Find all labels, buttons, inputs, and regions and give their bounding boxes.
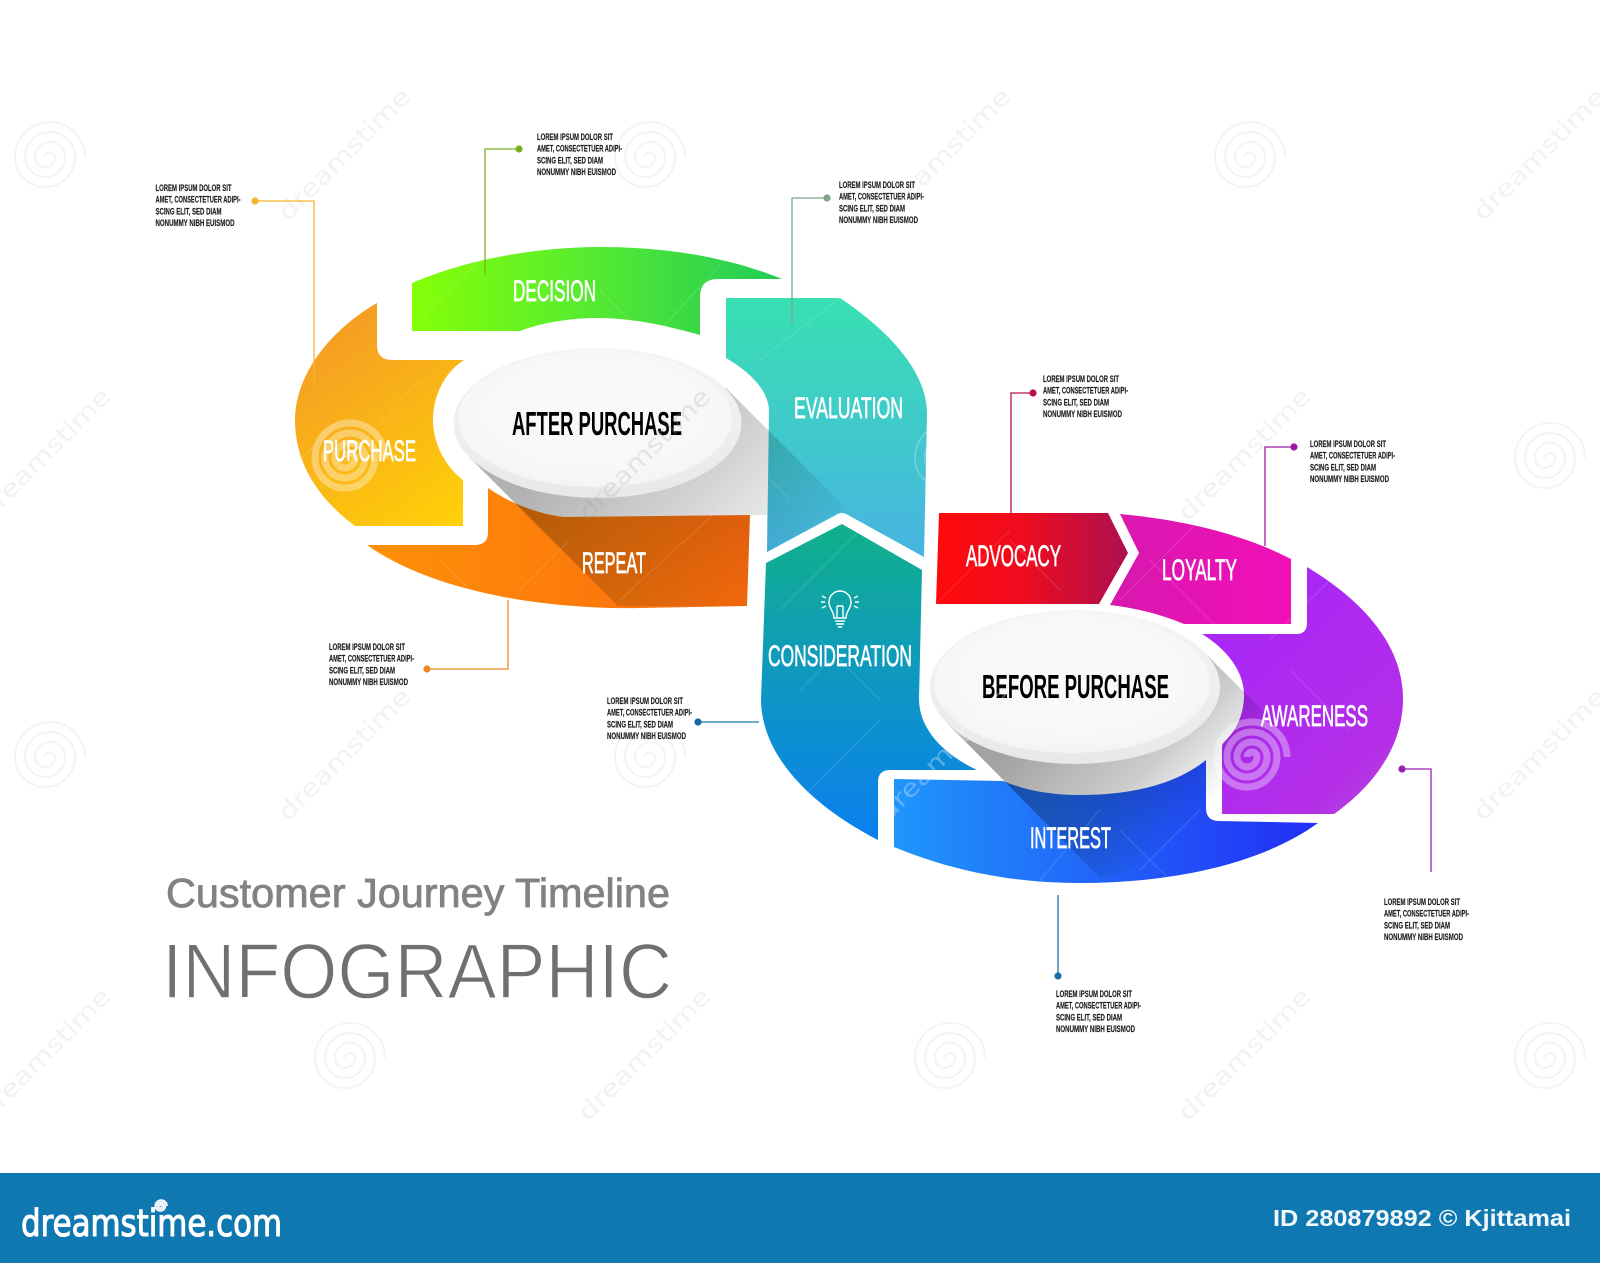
connector: advocacy bbox=[1011, 389, 1037, 513]
text: dreamstime bbox=[873, 83, 1016, 226]
text block: decision: AMET, CONSECTETUER ADIPI- bbox=[537, 144, 622, 154]
title: Customer Journey Timeline bbox=[166, 870, 670, 916]
text block: interest: SCING ELIT, SED DIAM bbox=[1056, 1012, 1122, 1022]
label: awareness: AWARENESS bbox=[1261, 700, 1368, 733]
text block: awareness: SCING ELIT, SED DIAM bbox=[1384, 920, 1450, 930]
footer bar bbox=[0, 1173, 1600, 1263]
text block: decision bbox=[537, 132, 622, 177]
text block: consideration bbox=[607, 696, 692, 741]
text block: loyalty bbox=[1310, 439, 1395, 484]
footer logo: dreamstime.com bbox=[21, 1202, 282, 1245]
text block: advocacy: AMET, CONSECTETUER ADIPI- bbox=[1043, 386, 1128, 396]
connector: loyalty bbox=[1265, 443, 1298, 546]
text block: decision: NONUMMY NIBH EUISMOD bbox=[537, 167, 616, 177]
text block: loyalty: NONUMMY NIBH EUISMOD bbox=[1310, 474, 1389, 484]
segment: advocacy bbox=[936, 513, 1128, 604]
text block: consideration: SCING ELIT, SED DIAM bbox=[607, 719, 673, 729]
footer credit: ID 280879892 © Kjittamai bbox=[1273, 1205, 1571, 1231]
shadow: after purchase bbox=[470, 388, 846, 606]
label: decision: DECISION bbox=[513, 275, 596, 308]
text block: interest: NONUMMY NIBH EUISMOD bbox=[1056, 1024, 1135, 1034]
segment: awareness bbox=[1202, 567, 1403, 814]
label: advocacy: ADVOCACY bbox=[966, 540, 1061, 573]
text block: loyalty: AMET, CONSECTETUER ADIPI- bbox=[1310, 451, 1395, 461]
text: dreamstime bbox=[873, 683, 1016, 826]
text block: loyalty: SCING ELIT, SED DIAM bbox=[1310, 462, 1376, 472]
text: dreamstime bbox=[273, 683, 416, 826]
text block: consideration: NONUMMY NIBH EUISMOD bbox=[607, 731, 686, 741]
connector: evaluation bbox=[792, 194, 831, 325]
center pill: before purchase: BEFORE PURCHASE bbox=[982, 668, 1169, 705]
text block: consideration: LOREM IPSUM DOLOR SIT bbox=[607, 696, 683, 706]
text block: advocacy: SCING ELIT, SED DIAM bbox=[1043, 397, 1109, 407]
text block: advocacy: NONUMMY NIBH EUISMOD bbox=[1043, 409, 1122, 419]
text block: purchase: SCING ELIT, SED DIAM bbox=[156, 206, 222, 216]
segment: repeat bbox=[367, 488, 750, 608]
connector: awareness bbox=[1398, 765, 1431, 872]
text block: awareness: LOREM IPSUM DOLOR SIT bbox=[1384, 897, 1460, 907]
text block: awareness: NONUMMY NIBH EUISMOD bbox=[1384, 932, 1463, 942]
segment: interest bbox=[894, 760, 1318, 883]
connector: interest bbox=[1054, 895, 1062, 980]
connector: repeat bbox=[423, 600, 508, 673]
text block: interest bbox=[1056, 989, 1141, 1034]
text block: decision: SCING ELIT, SED DIAM bbox=[537, 155, 603, 165]
text: dreamstime bbox=[573, 983, 716, 1126]
text block: repeat: NONUMMY NIBH EUISMOD bbox=[329, 677, 408, 687]
text block: evaluation: AMET, CONSECTETUER ADIPI- bbox=[839, 192, 924, 202]
text block: purchase: NONUMMY NIBH EUISMOD bbox=[156, 218, 235, 228]
text block: interest: AMET, CONSECTETUER ADIPI- bbox=[1056, 1001, 1141, 1011]
connector: decision bbox=[485, 145, 523, 275]
text: dreamstime bbox=[1468, 683, 1600, 826]
text: dreamstime bbox=[573, 383, 716, 526]
label: loyalty: LOYALTY bbox=[1162, 554, 1237, 587]
text block: decision: LOREM IPSUM DOLOR SIT bbox=[537, 132, 613, 142]
segment: consideration bbox=[761, 524, 977, 840]
text block: evaluation: SCING ELIT, SED DIAM bbox=[839, 203, 905, 213]
segment: loyalty bbox=[1110, 514, 1291, 624]
text block: repeat: LOREM IPSUM DOLOR SIT bbox=[329, 642, 405, 652]
text block: advocacy bbox=[1043, 374, 1128, 419]
connector lines and dots bbox=[251, 145, 1431, 980]
connector: consideration bbox=[694, 718, 759, 726]
text block: awareness bbox=[1384, 897, 1469, 942]
title bbox=[162, 870, 672, 1015]
text block: evaluation: NONUMMY NIBH EUISMOD bbox=[839, 215, 918, 225]
shadow: before purchase bbox=[946, 652, 1290, 878]
segment: evaluation bbox=[726, 298, 927, 557]
text: dreamstime bbox=[1173, 383, 1316, 526]
text block: loyalty: LOREM IPSUM DOLOR SIT bbox=[1310, 439, 1386, 449]
text block: advocacy: LOREM IPSUM DOLOR SIT bbox=[1043, 374, 1119, 384]
text block: evaluation bbox=[839, 180, 924, 225]
text block: evaluation: LOREM IPSUM DOLOR SIT bbox=[839, 180, 915, 190]
text block: repeat: SCING ELIT, SED DIAM bbox=[329, 665, 395, 675]
text block: awareness: AMET, CONSECTETUER ADIPI- bbox=[1384, 909, 1469, 919]
text block: interest: LOREM IPSUM DOLOR SIT bbox=[1056, 989, 1132, 999]
text block: purchase: AMET, CONSECTETUER ADIPI- bbox=[156, 195, 241, 205]
title: INFOGRAPHIC bbox=[162, 927, 672, 1015]
text: dreamstime bbox=[1468, 83, 1600, 226]
text: dreamstime bbox=[1173, 983, 1316, 1126]
text block: repeat: AMET, CONSECTETUER ADIPI- bbox=[329, 654, 414, 664]
center pill: after purchase bbox=[454, 348, 742, 498]
label: evaluation: EVALUATION bbox=[794, 392, 903, 425]
segment: purchase bbox=[295, 303, 464, 526]
text block: purchase: LOREM IPSUM DOLOR SIT bbox=[156, 183, 232, 193]
text block: consideration: AMET, CONSECTETUER ADIPI- bbox=[607, 708, 692, 718]
segment: decision bbox=[412, 247, 782, 335]
text: dreamstime bbox=[273, 83, 416, 226]
label: consideration: CONSIDERATION bbox=[768, 640, 912, 673]
label: interest: INTEREST bbox=[1030, 822, 1111, 855]
center pill: after purchase: AFTER PURCHASE bbox=[512, 405, 682, 442]
icon: light bulb bbox=[821, 591, 859, 627]
text block: purchase bbox=[156, 183, 241, 228]
center pill: before purchase bbox=[930, 610, 1220, 764]
label: repeat: REPEAT bbox=[582, 547, 646, 580]
connector: purchase bbox=[251, 197, 314, 383]
text block: repeat bbox=[329, 642, 414, 687]
label: purchase: PURCHASE bbox=[323, 435, 416, 468]
